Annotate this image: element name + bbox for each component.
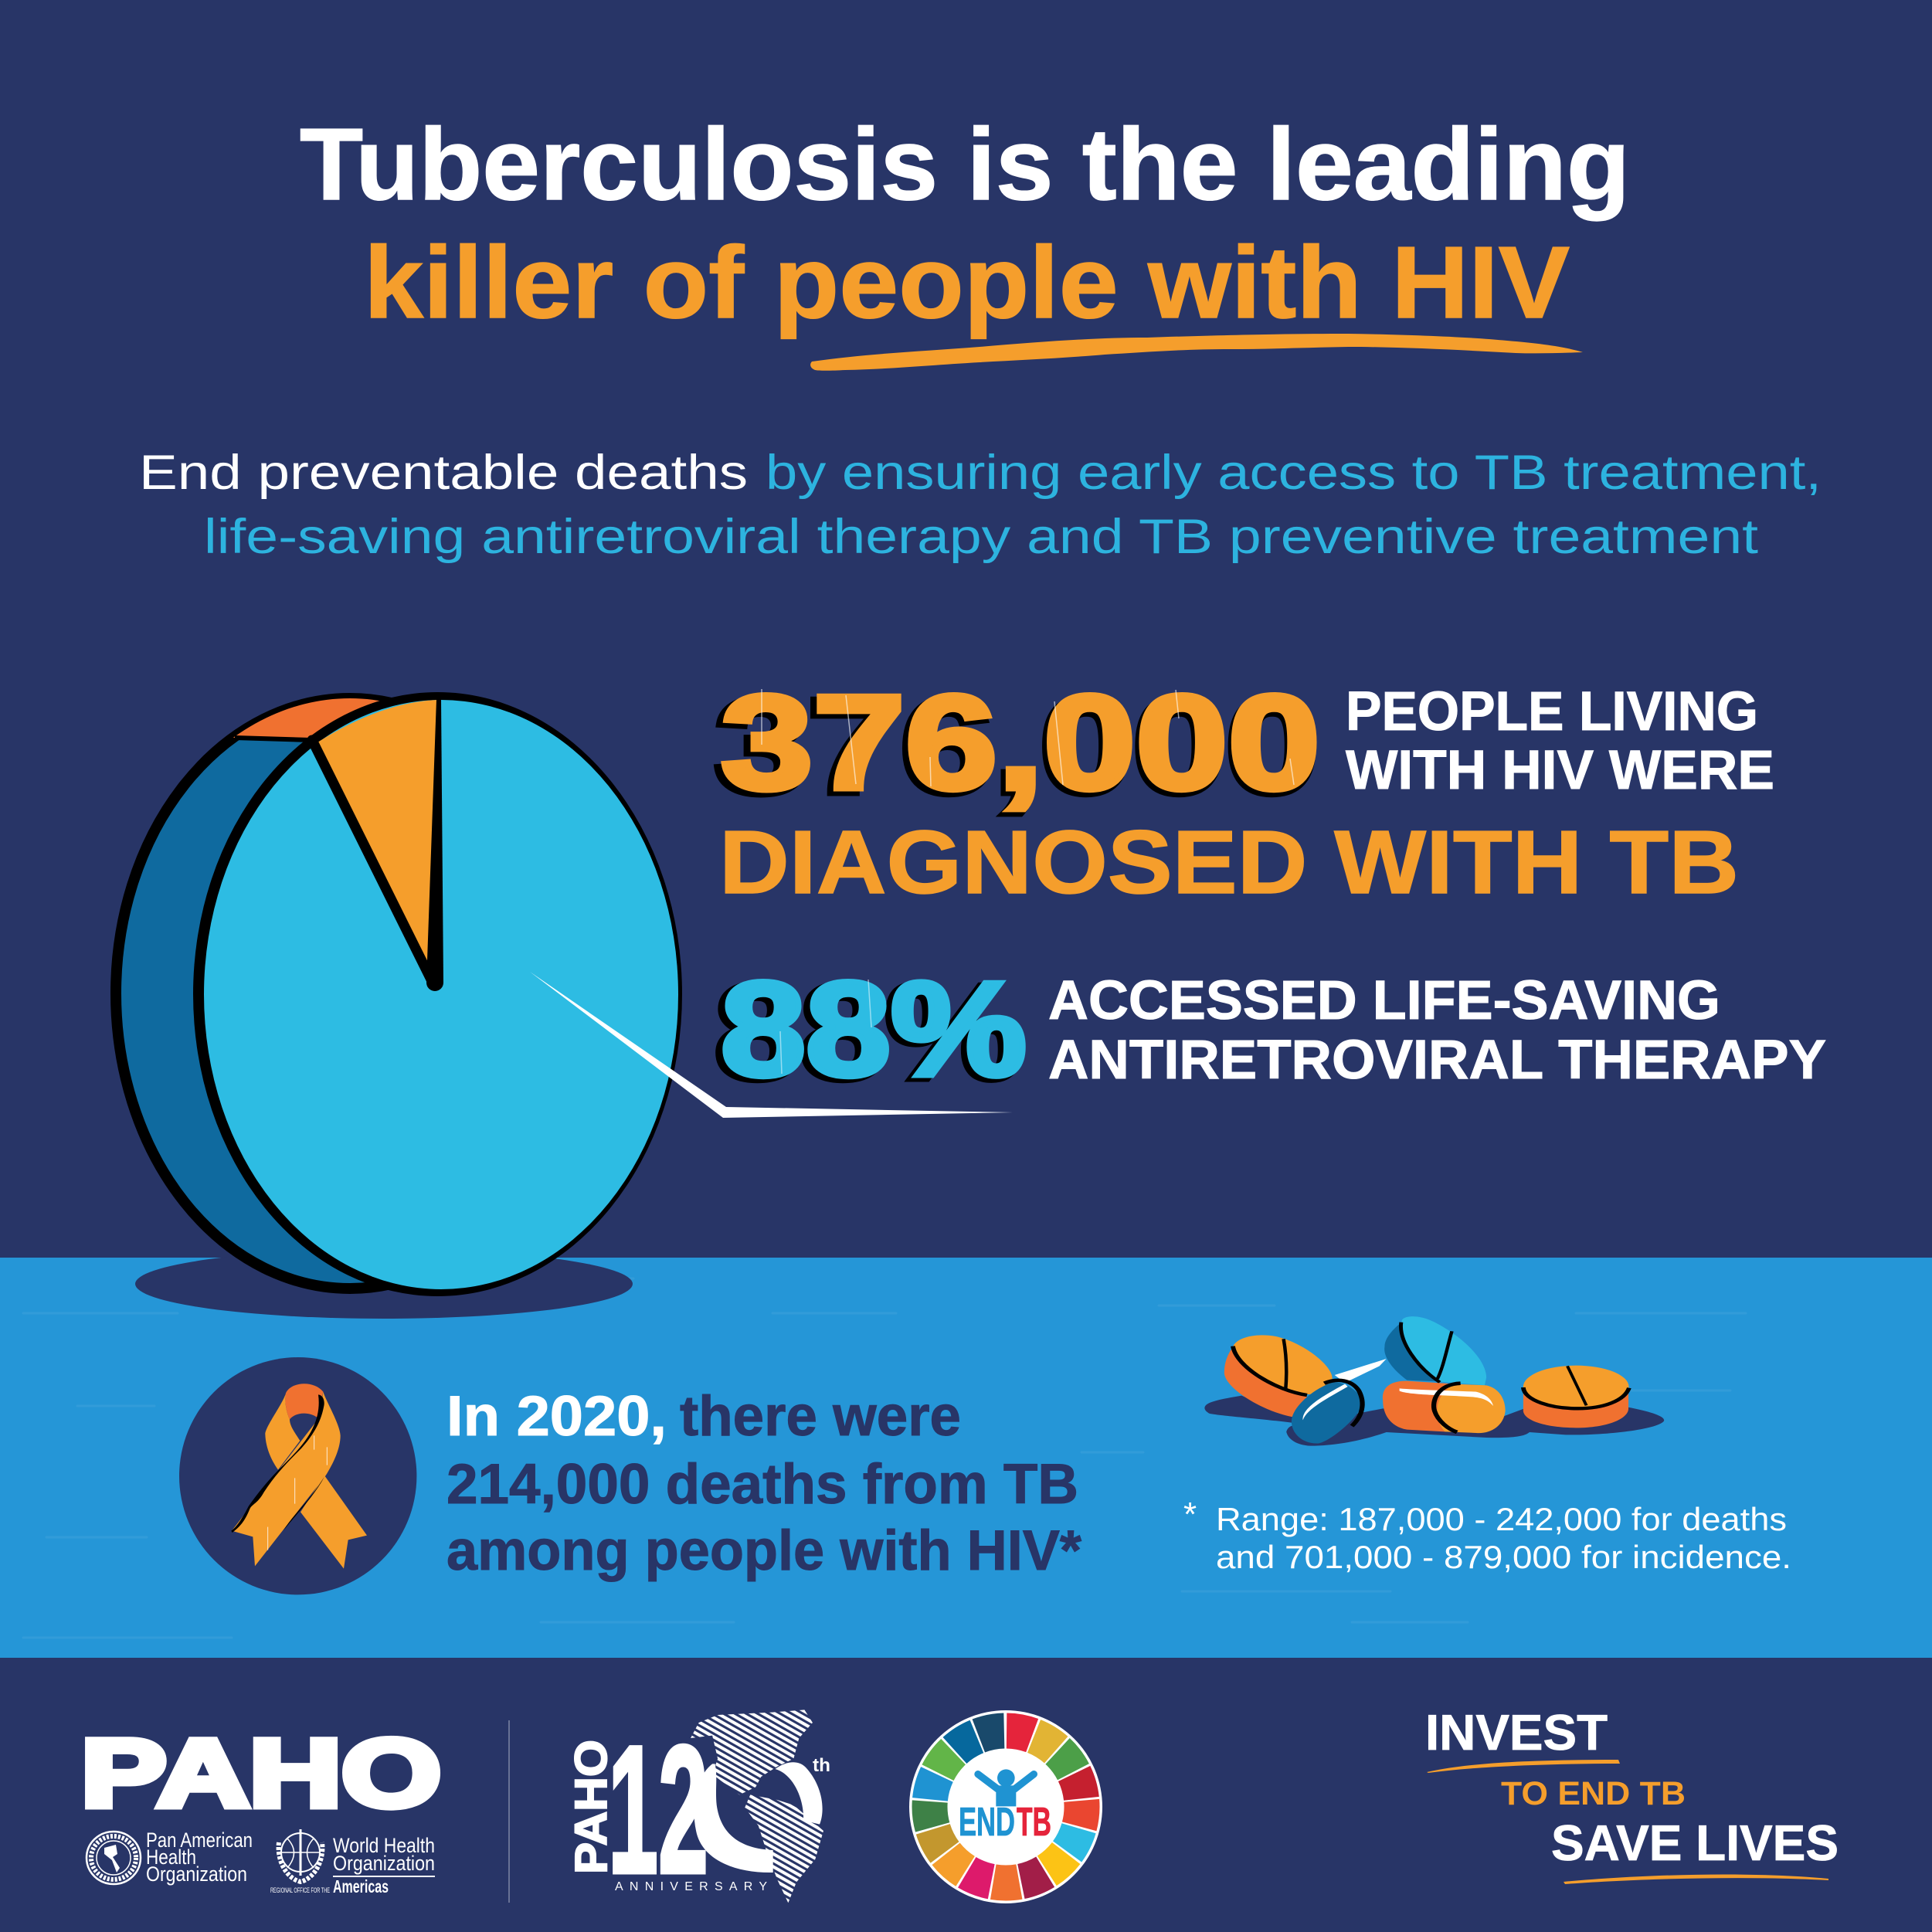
logo: PAHO: PAHO xyxy=(81,1720,441,1827)
map stripes xyxy=(691,1710,813,1794)
text: deaths in 2020: In 2020, xyxy=(446,1385,667,1448)
pie front face xyxy=(204,700,678,1289)
subheading: by ensuring early access to TB treatment, xyxy=(766,446,1822,500)
label: accessed life-saving antiretroviral therapy: ANTIRETROVIRAL THERAPY xyxy=(1048,1030,1826,1091)
logo: PAHO 120th anniversary: 12 xyxy=(608,1708,708,1912)
tagline: invest to end TB save lives xyxy=(1425,1704,1839,1884)
subheading xyxy=(139,446,1822,564)
pointer line xyxy=(530,972,1013,1118)
logo: End TB wheel: END xyxy=(959,1800,1015,1845)
title: killer of people with HIV xyxy=(364,226,1570,339)
logo: End TB wheel xyxy=(909,1710,1102,1903)
subheading: life-saving antiretroviral therapy and TB preventive treatment xyxy=(204,510,1759,564)
logo: PAHO 120th anniversary: th xyxy=(813,1755,830,1776)
footnote xyxy=(1183,1496,1791,1575)
logo: PAHO xyxy=(81,1720,441,1896)
slice outlines xyxy=(312,740,431,980)
label: accessed life-saving antiretroviral therapy: ACCESSED LIFE-SAVING xyxy=(1048,970,1720,1031)
logo: PAHO 120th anniversary: PAHO xyxy=(566,1740,616,1874)
WHO name: Americas xyxy=(333,1876,389,1896)
PAHO name: Organization xyxy=(146,1862,247,1886)
WHO name: World Health xyxy=(333,1834,435,1857)
text: deaths in 2020: among people with HIV* xyxy=(446,1519,1082,1582)
subheading: End preventable deaths xyxy=(139,446,748,500)
label: people living with HIV were: WITH HIV WERE xyxy=(1346,740,1774,801)
pie side xyxy=(116,698,584,1289)
label: people living with HIV were: PEOPLE LIVING xyxy=(1346,681,1758,742)
text: deaths in 2020: there were xyxy=(680,1385,961,1448)
PAHO name: Health xyxy=(146,1845,196,1869)
stat: 88%: 88% xyxy=(715,956,1022,1107)
title xyxy=(300,107,1630,371)
divider xyxy=(508,1720,510,1903)
text: deaths in 2020: 214,000 deaths from TB xyxy=(446,1453,1078,1516)
tagline: invest to end TB save lives: SAVE LIVES xyxy=(1551,1815,1839,1871)
footnote: * xyxy=(1183,1496,1197,1533)
logo: PAHO 120th anniversary: ANNIVERSARY xyxy=(615,1880,769,1893)
stat: 376,000: 376,000 xyxy=(721,667,1320,817)
footnote: and 701,000 - 879,000 for incidence. xyxy=(1216,1539,1791,1575)
PAHO name: Pan American xyxy=(146,1828,253,1852)
icon: ribbon in circle xyxy=(179,1357,416,1594)
label: people living with HIV were xyxy=(1346,681,1774,801)
stat: 88%: 88% xyxy=(721,953,1027,1104)
label: accessed life-saving antiretroviral therapy xyxy=(1048,970,1826,1091)
pie front outline xyxy=(193,692,682,1296)
orange side wedge xyxy=(233,698,380,738)
PAHO name xyxy=(146,1828,253,1886)
zero xyxy=(694,1764,773,1873)
WHO emblem xyxy=(279,1829,322,1882)
WHO name: REGIONAL OFFICE FOR THE xyxy=(270,1886,330,1894)
tagline: invest to end TB save lives: TO END TB xyxy=(1501,1775,1686,1812)
icon: pills xyxy=(1204,1316,1664,1446)
blue floor band xyxy=(0,1258,1932,1658)
WHO name xyxy=(270,1834,435,1896)
person icon xyxy=(978,1769,1034,1806)
footnote: Range: 187,000 - 242,000 for deaths xyxy=(1216,1501,1787,1537)
pie chart shadow xyxy=(135,1249,633,1319)
stat: 376,000: 376,000 xyxy=(715,671,1319,821)
pie chart xyxy=(108,688,682,1296)
tagline: invest to end TB save lives: INVEST xyxy=(1425,1704,1608,1761)
PAHO emblem xyxy=(87,1832,141,1884)
heading: diagnosed with TB: DIAGNOSED WITH TB xyxy=(719,812,1739,912)
WHO name: Organization xyxy=(333,1852,435,1875)
title: Tuberculosis is the leading xyxy=(300,107,1630,221)
text: deaths in 2020 xyxy=(446,1385,1082,1582)
slice: 12% xyxy=(317,700,438,981)
logo: End TB wheel: TB xyxy=(1017,1800,1051,1845)
